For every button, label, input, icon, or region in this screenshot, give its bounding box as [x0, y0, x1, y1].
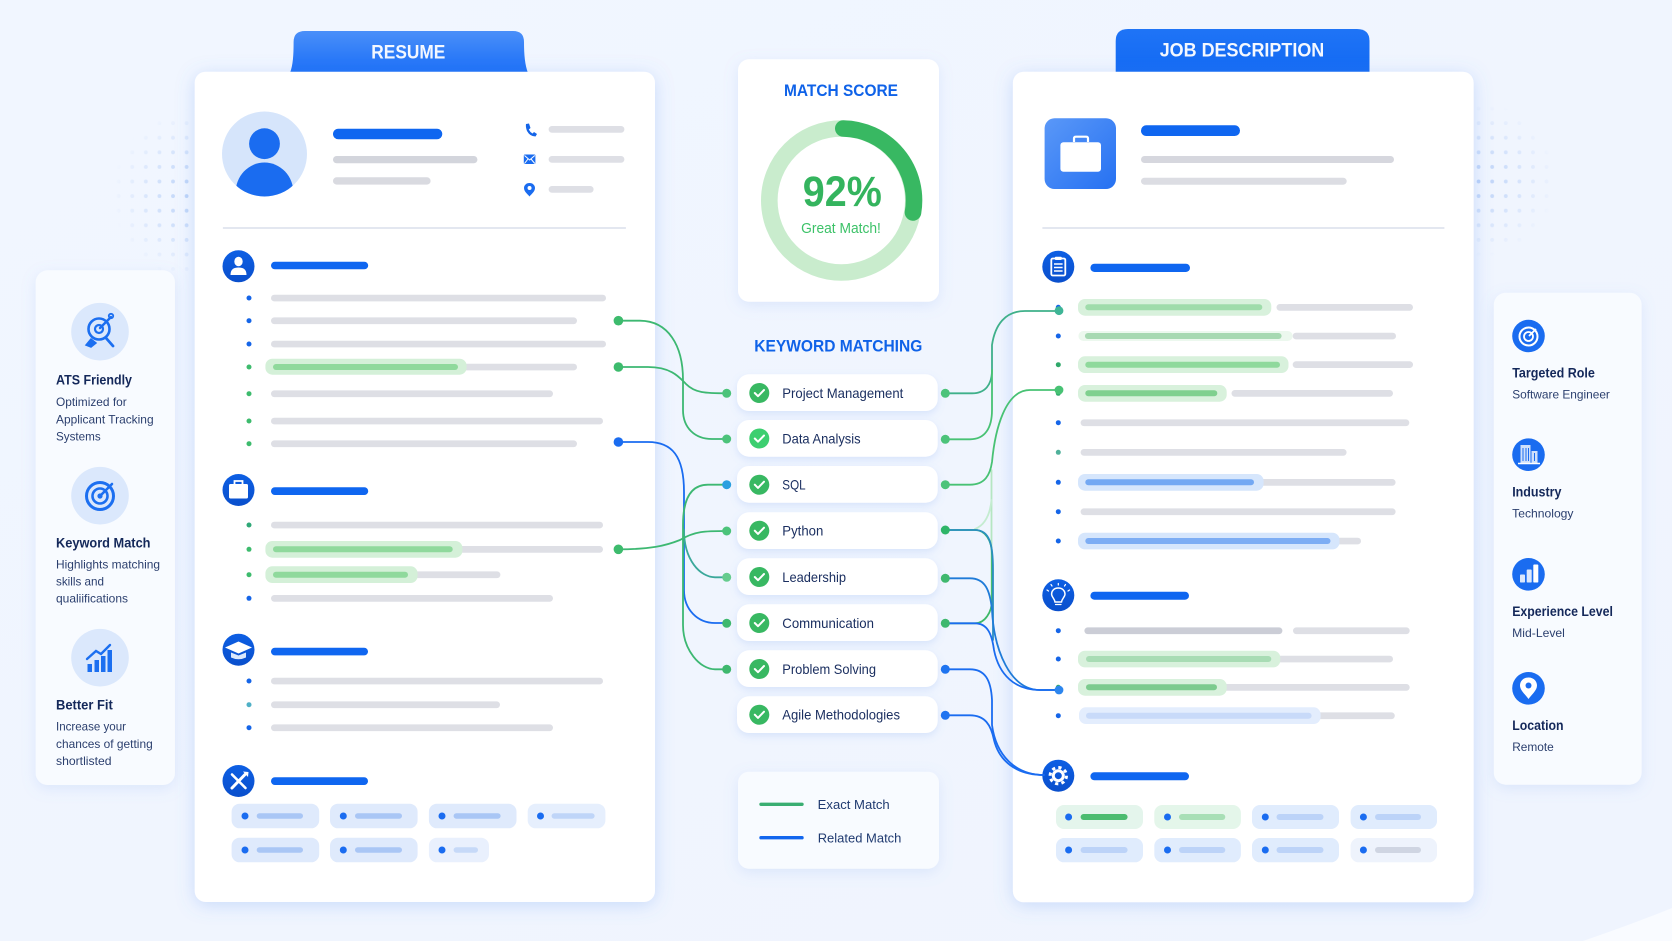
item: Location: Remote [1512, 740, 1554, 754]
panel: match score [738, 59, 939, 302]
icon: tools [222, 765, 254, 797]
item: Location: Location [1512, 718, 1564, 733]
panel: job description [1013, 29, 1474, 902]
benefit: Keyword Match [56, 467, 160, 606]
legend: exact match: Exact Match [818, 797, 890, 812]
item: Industry: Industry [1512, 484, 1562, 500]
icon: light bulb [1042, 579, 1074, 611]
name and title lines [333, 129, 477, 185]
icon: location pin [524, 183, 535, 196]
item: Experience Level [1512, 558, 1613, 640]
highlight row [1078, 385, 1393, 402]
highlight row related [1078, 474, 1396, 491]
legend: exact match [759, 797, 890, 812]
requirement chips [1056, 805, 1437, 862]
background corner shape [1583, 908, 1672, 941]
section: requirements [1042, 579, 1410, 724]
section: profile [222, 250, 606, 447]
pill: Leadership: Leadership [782, 569, 846, 585]
donut chart: score [769, 128, 914, 272]
dot pattern right [1476, 122, 1535, 242]
skill chips [232, 804, 605, 862]
panel: benefits left [36, 270, 175, 785]
highlight row [1078, 651, 1393, 667]
pill: Python: Python [782, 523, 823, 539]
heading: match score: MATCH SCORE [784, 81, 898, 100]
benefit: Keyword Match: Keyword Match [56, 536, 150, 551]
section: experience [222, 474, 603, 602]
label: great match: Great Match! [801, 221, 881, 237]
benefit: ATS Friendly: ATS Friendly [56, 373, 132, 388]
pill: Communication [737, 604, 938, 641]
item: Targeted Role: Targeted Role [1512, 366, 1595, 380]
icon: mail [524, 154, 535, 164]
benefit: ATS Friendly: Optimized for [56, 395, 127, 409]
pill: Problem Solving: Problem Solving [782, 661, 876, 677]
heading tab: job description: JOB DESCRIPTION [1160, 41, 1324, 62]
contact details [524, 124, 624, 196]
panel: resume [195, 31, 655, 902]
section: education [222, 634, 603, 731]
pill: SQL [737, 466, 938, 503]
job title lines [1141, 125, 1394, 185]
connector nodes right [941, 306, 1063, 720]
icon: target [1512, 320, 1545, 352]
icon: map pin [1512, 672, 1545, 705]
icon: phone [526, 124, 537, 136]
icon: growth chart [87, 645, 112, 672]
highlight: matched line [265, 566, 418, 583]
section: skills [222, 765, 605, 862]
connectors: resume to keywords [614, 316, 731, 674]
heading tab: job description [1116, 29, 1370, 73]
pill: Python [737, 512, 938, 549]
highlight row [1078, 299, 1413, 316]
highlight: matched line [265, 359, 467, 375]
heading: keyword matching: KEYWORD MATCHING [754, 336, 922, 355]
heading tab: resume: RESUME [371, 43, 445, 64]
legend: related match: Related Match [818, 831, 901, 846]
legend: related match [759, 831, 901, 846]
keyword pills [737, 374, 938, 733]
highlight row [1078, 679, 1410, 696]
pill: Leadership [737, 558, 938, 595]
benefit: Keyword Match: Highlights matching [56, 558, 160, 572]
icon: target with magnifier [86, 314, 113, 347]
benefit: ATS Friendly: Applicant Tracking [56, 412, 154, 426]
icon: briefcase tile [1045, 118, 1116, 189]
icon: person [222, 250, 254, 282]
panel: job summary right [1494, 293, 1642, 785]
benefit: Better Fit [56, 629, 153, 768]
section: skills [1042, 760, 1437, 862]
icon: bars [1512, 558, 1545, 591]
highlight row [1078, 331, 1396, 341]
pill: SQL: SQL [782, 477, 806, 493]
benefit: Keyword Match: skills and [56, 575, 104, 589]
highlight row pale [1079, 707, 1395, 724]
icon: briefcase [222, 474, 254, 506]
benefit: ATS Friendly [56, 303, 154, 443]
benefit: Better Fit: shortlisted [56, 754, 112, 768]
heading tab: resume [290, 31, 528, 73]
avatar [222, 112, 307, 196]
highlight row related [1078, 533, 1361, 549]
highlight row [1078, 356, 1413, 373]
benefit: Better Fit: Increase your [56, 720, 126, 734]
pill: Data Analysis [737, 420, 938, 457]
value: 92%: 92% [803, 168, 882, 216]
benefit: Better Fit: chances of getting [56, 737, 153, 751]
connector nodes left [614, 316, 731, 674]
icon: graduation cap [222, 634, 254, 666]
item: Location [1512, 672, 1564, 754]
pill: Communication: Communication [782, 615, 874, 631]
legend [738, 772, 939, 869]
pill: Data Analysis: Data Analysis [782, 430, 861, 446]
icon: bullseye [86, 482, 114, 510]
pill: Agile Methodologies: Agile Methodologies [782, 707, 900, 723]
connectors: keywords to job description [941, 306, 1063, 775]
item: Targeted Role [1512, 320, 1610, 401]
pill: Project Management [737, 374, 938, 411]
icon: building [1512, 438, 1545, 471]
dot pattern left [130, 122, 188, 270]
item: Industry: Technology [1512, 507, 1574, 521]
pill: Agile Methodologies [737, 696, 938, 733]
item: Targeted Role: Software Engineer [1512, 387, 1610, 401]
icon: gear [1042, 760, 1074, 792]
benefit: ATS Friendly: Systems [56, 429, 101, 443]
item: Experience Level: Mid-Level [1512, 626, 1565, 640]
highlight: matched line [265, 541, 462, 558]
benefit: Better Fit: Better Fit [56, 698, 113, 713]
item: Industry [1512, 438, 1574, 521]
row [1084, 627, 1410, 634]
icon: clipboard [1042, 251, 1074, 283]
item: Experience Level: Experience Level [1512, 604, 1613, 619]
pill: Project Management: Project Management [782, 385, 903, 401]
benefit: Keyword Match: qualiifications [56, 592, 128, 606]
section: responsibilities [1042, 251, 1413, 549]
pill: Problem Solving [737, 650, 938, 687]
